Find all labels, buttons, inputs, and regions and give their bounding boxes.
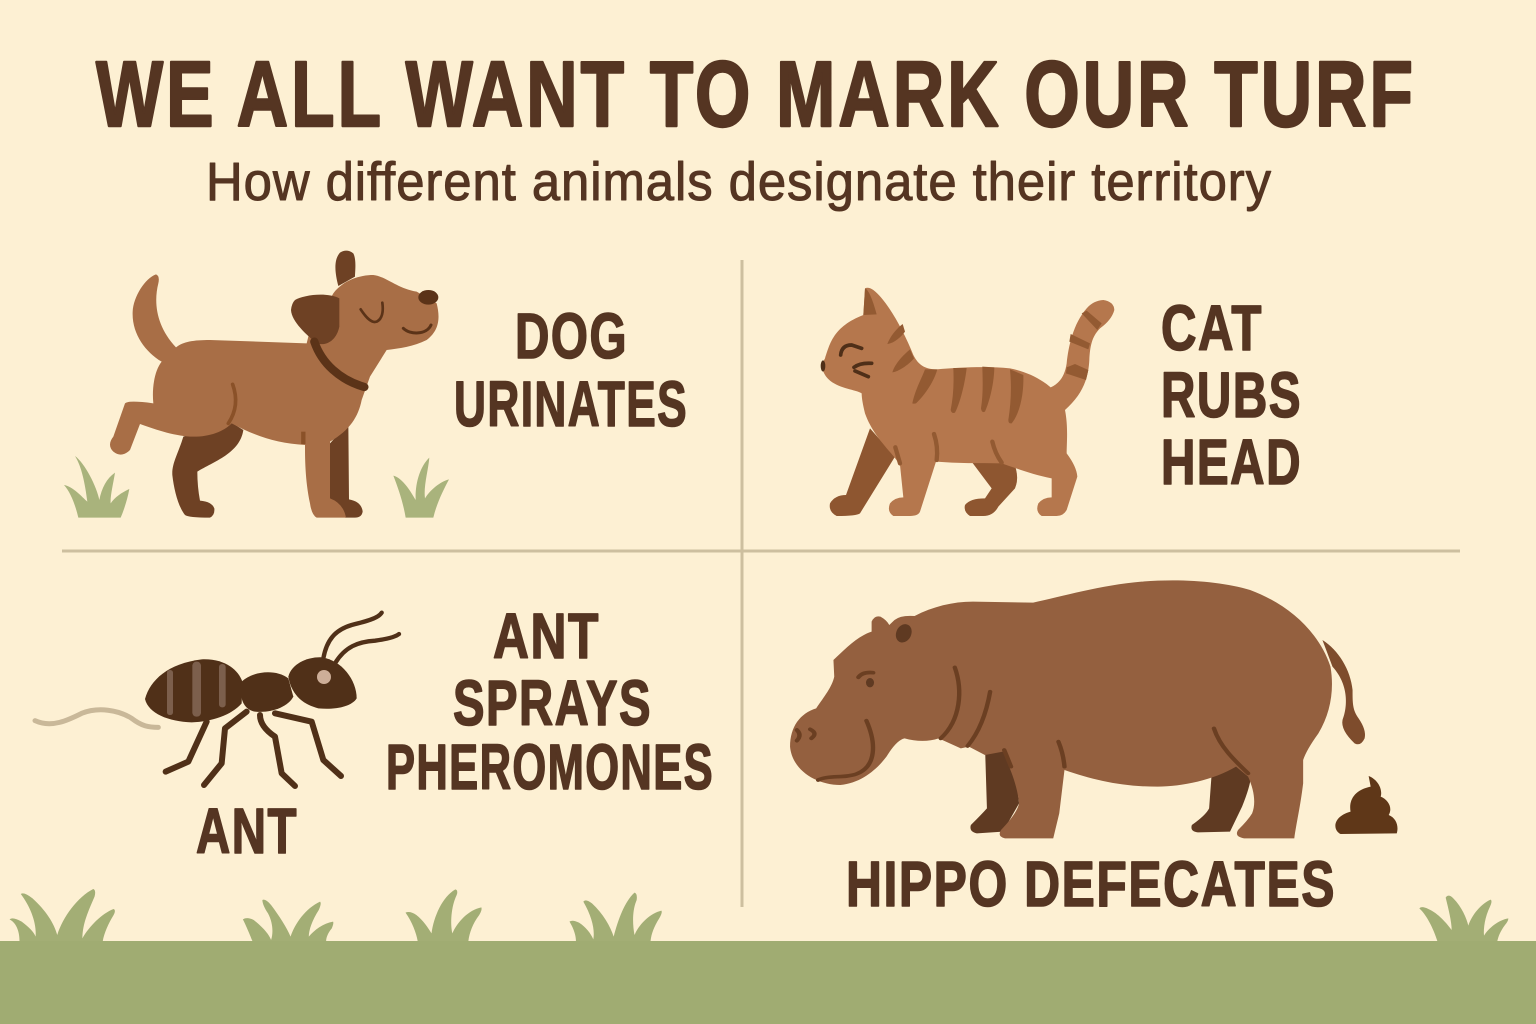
- label: pheromones: PHEROMONES: [386, 731, 714, 803]
- label: ant top: ANT: [493, 600, 600, 672]
- subtitle: How different animals designate their territory: [206, 152, 1272, 212]
- label: sprays: SPRAYS: [453, 667, 652, 739]
- label: hippo defecates: HIPPO DEFECATES: [846, 848, 1336, 920]
- icon: dung pile: [1335, 776, 1397, 834]
- ground: [0, 941, 1536, 1024]
- label: ant bottom: ANT: [196, 795, 298, 867]
- label: rubs: RUBS: [1161, 359, 1302, 431]
- grass tufts along the ground: [10, 889, 1508, 941]
- icon: ant: [35, 613, 399, 786]
- label: dog: DOG: [515, 300, 628, 372]
- label: cat: CAT: [1161, 292, 1263, 364]
- panel: hippo: [790, 580, 1397, 920]
- label: head: HEAD: [1161, 426, 1302, 498]
- panel: cat: [821, 288, 1302, 516]
- panel: ant: [35, 600, 714, 867]
- panel: dog: [64, 251, 688, 518]
- icon: dog: [64, 251, 449, 518]
- label: urinates: URINATES: [454, 368, 688, 440]
- icon: hippo: [790, 580, 1365, 838]
- icon: cat: [821, 288, 1114, 516]
